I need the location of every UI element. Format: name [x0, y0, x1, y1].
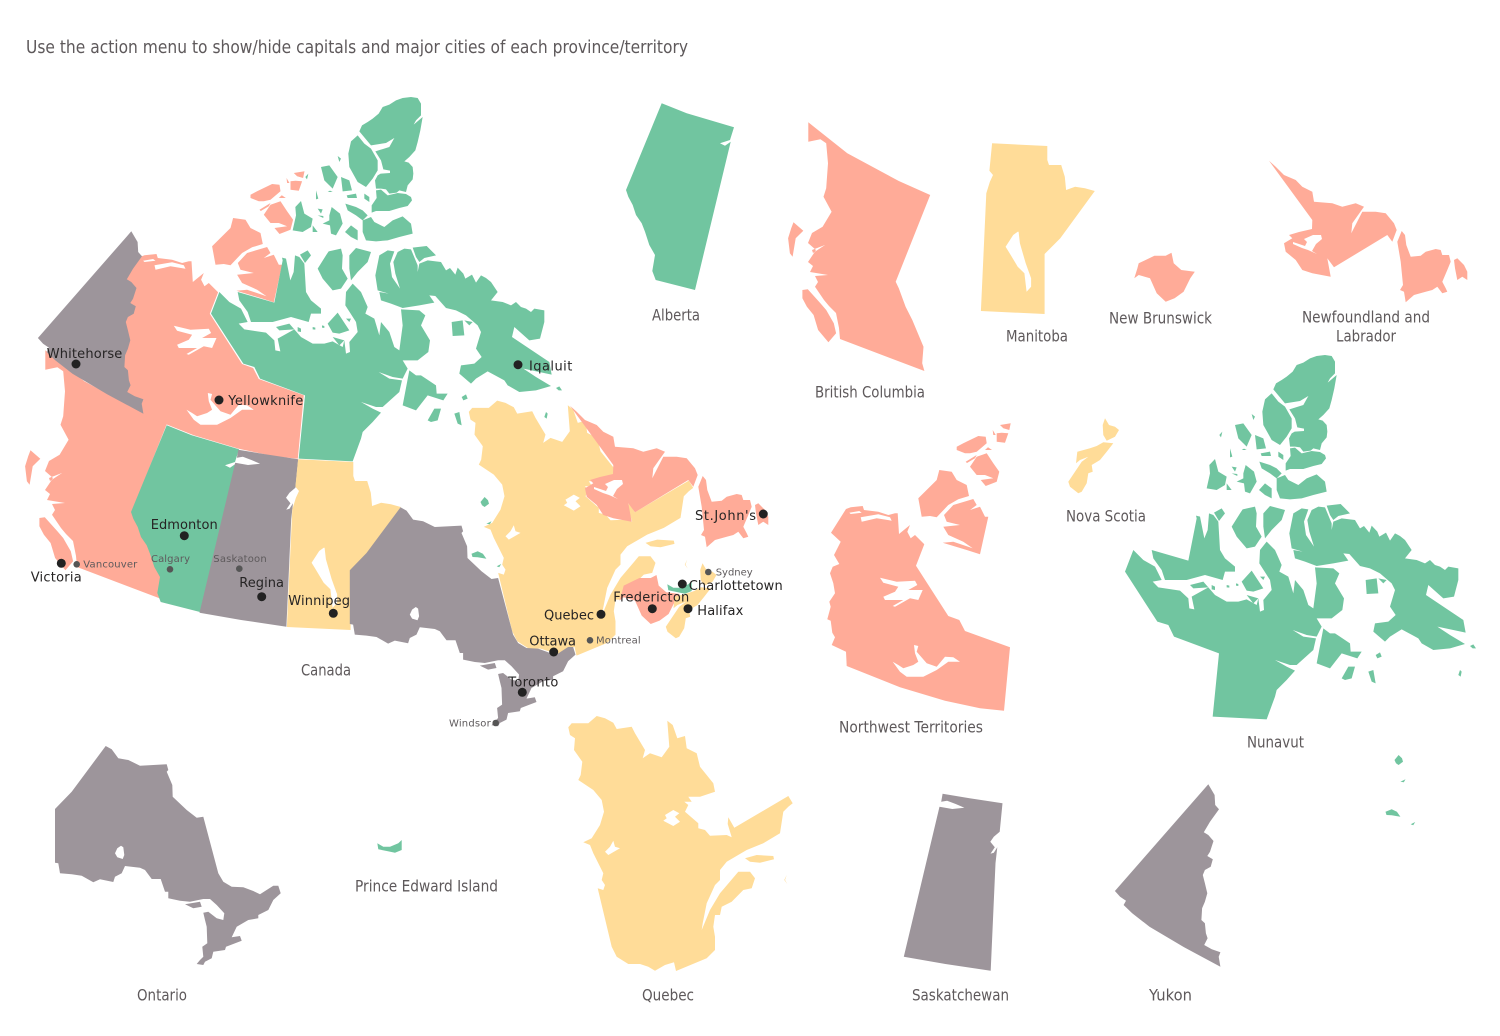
major city labels: Vancouver — [83, 560, 138, 571]
territory: Northwest Territories — [827, 423, 1011, 736]
province: Saskatchewan — [904, 794, 1009, 1004]
province: Newfoundland and Labrador: Labrador — [1336, 326, 1396, 346]
capital labels — [31, 347, 783, 691]
province: Prince Edward Island: Prince Edward Island — [355, 876, 498, 896]
province: Quebec: Quebec — [642, 986, 694, 1004]
territory: Yukon — [1115, 784, 1220, 1004]
province: Alberta: Alberta — [652, 306, 700, 324]
region: Nova Scotia — [666, 563, 716, 638]
province: Quebec — [568, 716, 793, 1004]
province: Manitoba: Manitoba — [1006, 326, 1068, 346]
province: Saskatchewan: Saskatchewan — [912, 986, 1009, 1004]
major city labels: Windsor — [449, 719, 492, 730]
city markers: major cities — [73, 561, 712, 726]
region: Saskatchewan — [200, 450, 298, 627]
capital labels: Yellowknife — [227, 394, 303, 409]
province: Manitoba — [981, 143, 1095, 346]
region: Northwest Territories — [121, 171, 304, 459]
region: Newfoundland and Labrador — [570, 406, 768, 547]
capital labels: Regina — [239, 576, 284, 591]
territory: Yukon: Yukon — [1148, 986, 1192, 1004]
territory: Nunavut: Nunavut — [1247, 732, 1304, 752]
region: Prince Edward Island — [667, 581, 692, 594]
caption: Canada: Canada — [301, 660, 351, 680]
major city labels: Calgary — [151, 554, 190, 565]
province: Ontario — [55, 746, 281, 1004]
capital labels: Toronto — [507, 676, 558, 691]
province: British Columbia: British Columbia — [815, 382, 925, 402]
title: Use the action menu to show/hide capitals and major cities of each province/territory — [26, 37, 688, 58]
province: Newfoundland and Labrador — [1269, 161, 1467, 346]
capital labels: Ottawa — [529, 635, 576, 650]
major city labels: Montreal — [596, 636, 641, 647]
province: British Columbia — [788, 122, 930, 402]
capital labels: Victoria — [31, 571, 82, 586]
region: British Columbia — [25, 350, 167, 599]
major city labels — [83, 554, 753, 730]
province: New Brunswick: New Brunswick — [1109, 308, 1213, 328]
capital labels: Winnipeg — [288, 594, 350, 609]
capital labels: Edmonton — [151, 518, 218, 533]
region: Quebec — [469, 401, 693, 656]
region: Yukon — [38, 231, 143, 414]
province: Nova Scotia: Nova Scotia — [1066, 506, 1146, 526]
region: Manitoba — [287, 459, 401, 630]
capital labels: Iqaluit — [529, 360, 572, 375]
territory: Northwest Territories: Northwest Territories — [839, 718, 983, 736]
capital labels: St.John's — [695, 509, 756, 524]
capital labels: Quebec — [544, 608, 594, 623]
region: Alberta — [131, 425, 239, 612]
province: Newfoundland and Labrador: Newfoundland and — [1302, 308, 1430, 326]
capital labels: Fredericton — [613, 591, 689, 606]
capital labels: Whitehorse — [47, 347, 122, 362]
major city labels: Saskatoon — [213, 554, 267, 565]
capital labels: Halifax — [697, 604, 744, 619]
capital labels: Charlottetown — [689, 579, 783, 594]
province: Prince Edward Island — [355, 840, 498, 896]
map: Canada — [25, 97, 783, 730]
province: New Brunswick — [1109, 253, 1213, 328]
province: Alberta — [626, 103, 734, 324]
province: Nova Scotia — [1066, 418, 1146, 526]
province: Ontario: Ontario — [137, 986, 187, 1004]
city markers: capitals — [57, 360, 768, 697]
region: Ontario — [350, 507, 576, 726]
region: New Brunswick — [619, 575, 680, 624]
region: Nunavut — [211, 97, 562, 567]
major city labels: Sydney — [716, 568, 753, 578]
territory: Nunavut — [1125, 355, 1476, 825]
